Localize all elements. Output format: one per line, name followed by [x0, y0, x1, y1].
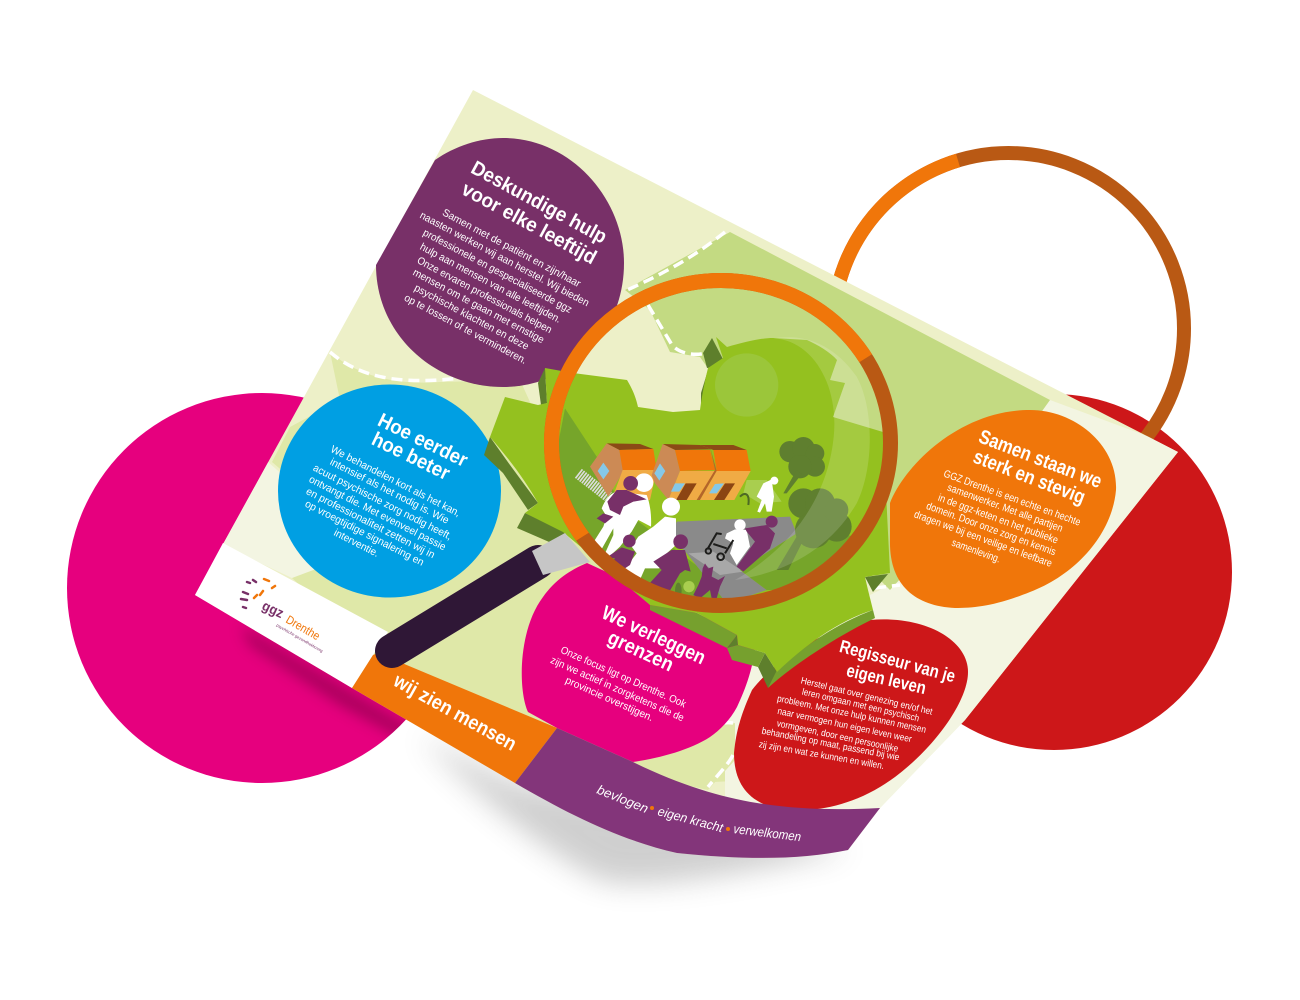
bench with person: [740, 477, 782, 513]
purple banner: bevlogen, eigen kracht, verwelkomen: eigen kracht: [656, 803, 726, 836]
shrub: [675, 581, 695, 594]
lower meadow: [740, 534, 851, 590]
lens rim: orange: [544, 273, 872, 541]
blob: Deskundige hulp: [376, 138, 624, 387]
lens glare: [735, 337, 870, 580]
heading: Regisseur van je eigen leven: eigen leven: [845, 660, 928, 698]
heading: Deskundige hulp voor elke leeftijd: Deskundige hulp: [467, 157, 610, 248]
body text purple: Samen met de patiënt en zijn/haar: [440, 207, 583, 290]
logo mark dashes: [241, 579, 275, 608]
blob: Hoe eerder hoe beter: [278, 384, 501, 598]
body text purple: hulp aan mensen van alle leeftijden.: [418, 241, 563, 326]
ring: orange and brown outline circle: [833, 153, 1184, 504]
lens rim: brown: [552, 280, 890, 606]
map side walls: [484, 338, 888, 688]
body text orange: domein. Door onze zorg en kennis: [925, 500, 1057, 558]
body text blue: ontvangt die. Met evenveel passie: [307, 473, 448, 553]
purple banner: bevlogen, eigen kracht, verwelkomen: [515, 728, 880, 858]
body text red: probleem. Met onze hulp kunnen mensen: [776, 693, 927, 736]
handle: ferrule: [532, 533, 590, 575]
body text blue: op vroegtijdige signalering en: [303, 498, 426, 569]
body text red: behandeling op maat, passend bij wie: [761, 726, 900, 763]
orange banner: wij zien mensen: wij zien mensen: [389, 669, 520, 756]
body text orange: samenwerker. Met alle partijen: [946, 482, 1065, 535]
folder sheet: [190, 85, 1190, 865]
ggz Drenthe logo: ggz: [260, 597, 286, 621]
body text blue: interventie.: [332, 527, 381, 560]
body text orange: [912, 468, 1082, 570]
region: right pale area: [725, 400, 1190, 820]
ggz Drenthe logo: Drenthe: [284, 612, 323, 643]
body text purple: mensen om te gaan met ernstige: [411, 267, 546, 346]
ggz Drenthe logo: [241, 579, 324, 653]
province map: Drenthe in 3D: [484, 337, 890, 688]
body text blue: en professionaliteit zetten wij in: [304, 486, 437, 561]
heading: Samen staan we sterk en stevig: sterk en stevig: [970, 446, 1088, 509]
body text orange: GGZ Drenthe is een echte en hechte: [942, 468, 1082, 529]
body text purple: op te lossen of te verminderen.: [402, 292, 529, 367]
region: far left pale area: [224, 462, 314, 578]
heading: We verleggen grenzen: grenzen: [604, 627, 677, 676]
map bevel: [650, 605, 875, 688]
body text purple: Onze ervaren professionals helpen: [415, 255, 554, 336]
grey road: [676, 516, 796, 598]
heading: Regisseur van je eigen leven: Regisseur van je: [837, 636, 958, 686]
body text blue: intensief als het nodig is. Wie: [328, 456, 451, 527]
heading: Samen staan we sterk en stevig: Samen staan we: [976, 426, 1105, 493]
body text orange: dragen we bij een veilige en leefbare: [912, 509, 1054, 570]
family with children: [591, 473, 695, 599]
heading: Hoe eerder hoe beter: hoe beter: [368, 428, 453, 485]
body text orange: samenleving.: [950, 537, 1002, 566]
body text blue: We behandelen kort als het kan,: [328, 443, 462, 519]
lens scene: [547, 337, 873, 603]
sheet background: [190, 85, 1190, 865]
map top surface: [490, 337, 890, 672]
heading: We verleggen grenzen: We verleggen: [598, 602, 709, 669]
paper drop shadow: [240, 625, 850, 884]
body text purple: professionele en gespecialiseerde ggz: [421, 227, 574, 316]
orange banner: wij zien mensen: [352, 653, 557, 783]
dog: [693, 563, 725, 598]
elderly person with walker and carer: [706, 516, 778, 572]
heading: Hoe eerder hoe beter: Hoe eerder: [374, 409, 471, 472]
purple banner: bevlogen, eigen kracht, verwelkomen: bevlogen: [595, 782, 651, 816]
lens hill shade: [559, 408, 722, 598]
dashed province borders: [330, 232, 900, 787]
blob: Samen staan we: [890, 410, 1116, 608]
body text purple: naasten werken wij aan herstel. Wij bieden: [418, 209, 591, 309]
body text red: naar vermogen hun eigen leven weer: [776, 706, 913, 745]
body text red: [758, 675, 934, 772]
body text red: zij zijn en wat ze kunnen en willen.: [758, 739, 885, 772]
body text blue: [303, 443, 462, 569]
body text purple: psychische klachten en deze: [412, 282, 531, 353]
body text red: Herstel gaat over genezing en/of het: [800, 675, 934, 718]
handle: grip: [392, 562, 538, 651]
region: lower left province: [272, 352, 760, 790]
body text blue: acuut psychische zorg nodig heeft,: [311, 462, 454, 543]
body text purple: [402, 207, 591, 367]
body text red: leren omgaan met een psychisch: [801, 687, 920, 724]
heading: Deskundige hulp voor elke leeftijd: voor elke leeftijd: [458, 178, 600, 269]
region: upper right province: [625, 232, 1050, 590]
body text pink: Onze focus ligt op Drenthe. Ook: [559, 644, 688, 711]
houses: [590, 443, 751, 500]
region: lower middle province: [682, 723, 735, 790]
body text pink: provincie overstijgen.: [563, 674, 655, 724]
body text orange: in de ggz-keten en het publieke: [936, 492, 1060, 547]
purple banner: bevlogen, eigen kracht, verwelkomen: verwelkomen: [733, 821, 802, 844]
ggz Drenthe logo: psychische gezondheidszorg: [276, 623, 324, 653]
white logo strip: [195, 543, 388, 688]
trees: [777, 437, 852, 570]
body text pink: zijn we actief in zorgketens die de: [549, 654, 686, 724]
magnifying glass: [392, 280, 890, 651]
blob: We verleggen grenzen: [522, 563, 755, 762]
blob: Regisseur van je eigen leven: [734, 619, 968, 810]
red background circle: [876, 394, 1232, 750]
white fence: [578, 473, 608, 497]
body text red: vormgeven, door een persoonlijke: [776, 718, 899, 755]
pink background circle: [67, 393, 457, 783]
